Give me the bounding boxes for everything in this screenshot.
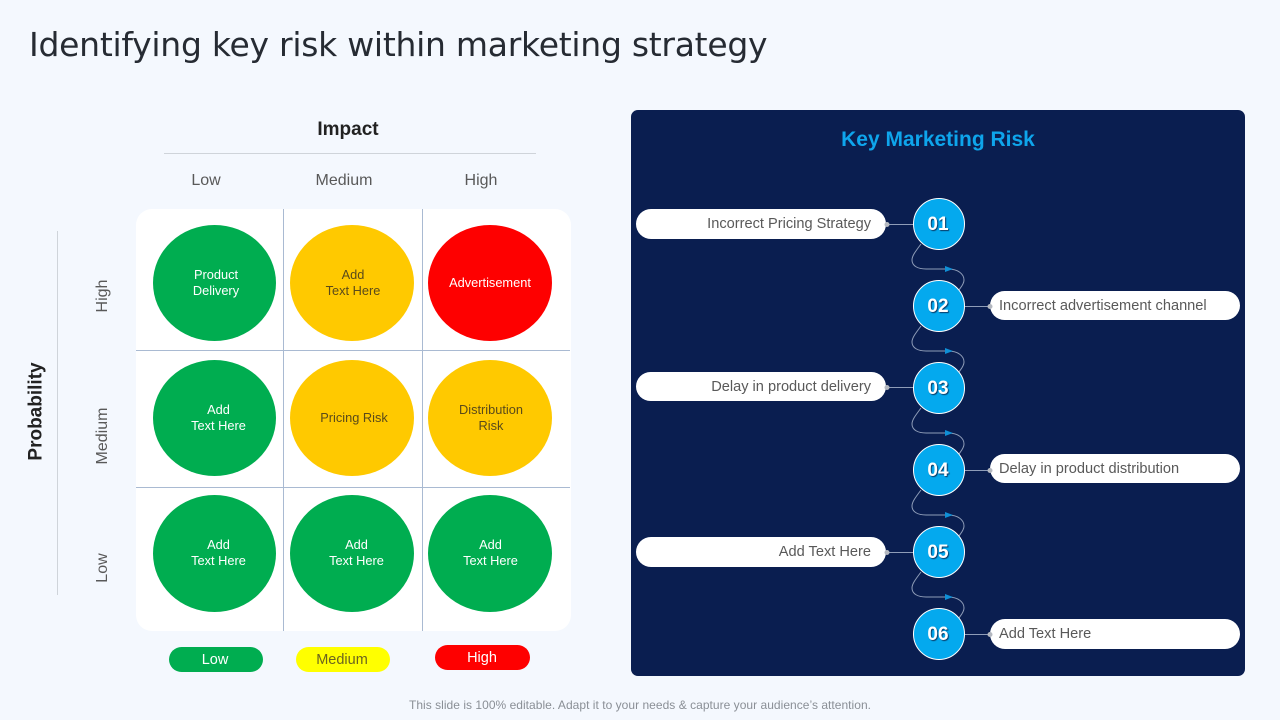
number 05: 05 [927,542,949,563]
circle: add text low high: Add [479,536,502,552]
circle: advertisement: Advertisement [449,275,531,290]
circle: product delivery: Delivery [193,283,239,298]
circle: add text low low: Add [207,536,230,552]
pill: incorrect advertisement channel: Incorrect advertisement channel [999,298,1207,314]
circle: product delivery [153,225,276,341]
circle: distribution risk [428,360,552,476]
pill: add text left: Add Text Here [779,544,871,560]
label: medium probability: Medium [94,408,111,464]
pill: delay in product distribution: Delay in product distribution [999,461,1179,477]
pill: incorrect pricing strategy: Incorrect Pricing Strategy [707,216,871,232]
number 02: 02 [927,296,949,317]
label: low impact: Low [191,172,221,189]
circle: distribution risk: Distribution [459,402,523,417]
circle: add text low high [428,495,552,612]
number 04: 04 [927,460,949,481]
legend: high: High [467,650,497,666]
pill: delay in product delivery [636,372,886,401]
footer note: This slide is 100% editable. Adapt it to your needs & capture your audience’s attention. [409,698,871,712]
label: medium impact: Medium [316,172,372,189]
circle: advertisement [428,225,552,341]
label: low probability: Low [94,553,111,583]
circle: add text low high: Text Here [463,552,518,568]
pill: add text left [636,537,886,567]
legend: medium [296,647,390,672]
label: high probability: High [94,280,111,312]
circle: add text medium low: Add [207,402,230,417]
probability axis line [57,231,58,595]
number 01: 01 [927,214,949,235]
pill: delay in product distribution [990,454,1240,483]
circle: add text low low: Text Here [191,552,246,568]
pill: add text right [990,619,1240,649]
panel heading: Key Marketing Risk [841,128,1035,151]
number 02 [913,280,965,332]
circle: add text medium low [153,360,276,476]
number 05 [913,526,965,578]
circle: add text high medium: Text Here [326,283,380,298]
impact column labels [164,153,536,192]
circle: product delivery: Product [194,267,238,282]
number 04 [913,444,965,496]
panel: risk matrix [136,209,571,631]
pill: incorrect pricing strategy [636,209,886,239]
pill: add text right: Add Text Here [999,626,1091,642]
legend: low: Low [202,652,228,668]
circle: add text low medium [290,495,414,612]
legend: medium: Medium [316,652,368,668]
circle: add text low medium: Text Here [329,552,384,568]
heading: probability: Probability [26,362,46,461]
circle: add text high medium [290,225,414,341]
heading: impact: Impact [317,119,379,140]
number 03: 03 [927,378,949,399]
circle: add text high medium: Add [342,267,364,282]
circle: pricing risk [290,360,414,476]
pill: incorrect advertisement channel [990,291,1240,320]
number 01 [913,198,965,250]
circle: add text low medium: Add [345,536,368,552]
number 06 [913,608,965,660]
pill: delay in product delivery: Delay in product delivery [711,379,871,395]
panel: key marketing risk [631,110,1245,676]
number 06: 06 [927,624,949,645]
circle: pricing risk: Pricing Risk [320,410,388,425]
number 03 [913,362,965,414]
circle: distribution risk: Risk [479,418,503,433]
legend: high [435,645,530,670]
legend: low [169,647,263,672]
title: Identifying key risk within marketing strategy [29,25,767,64]
circle: add text low low [153,495,276,612]
label: high impact: High [465,172,497,189]
circle: add text medium low: Text Here [191,418,246,433]
